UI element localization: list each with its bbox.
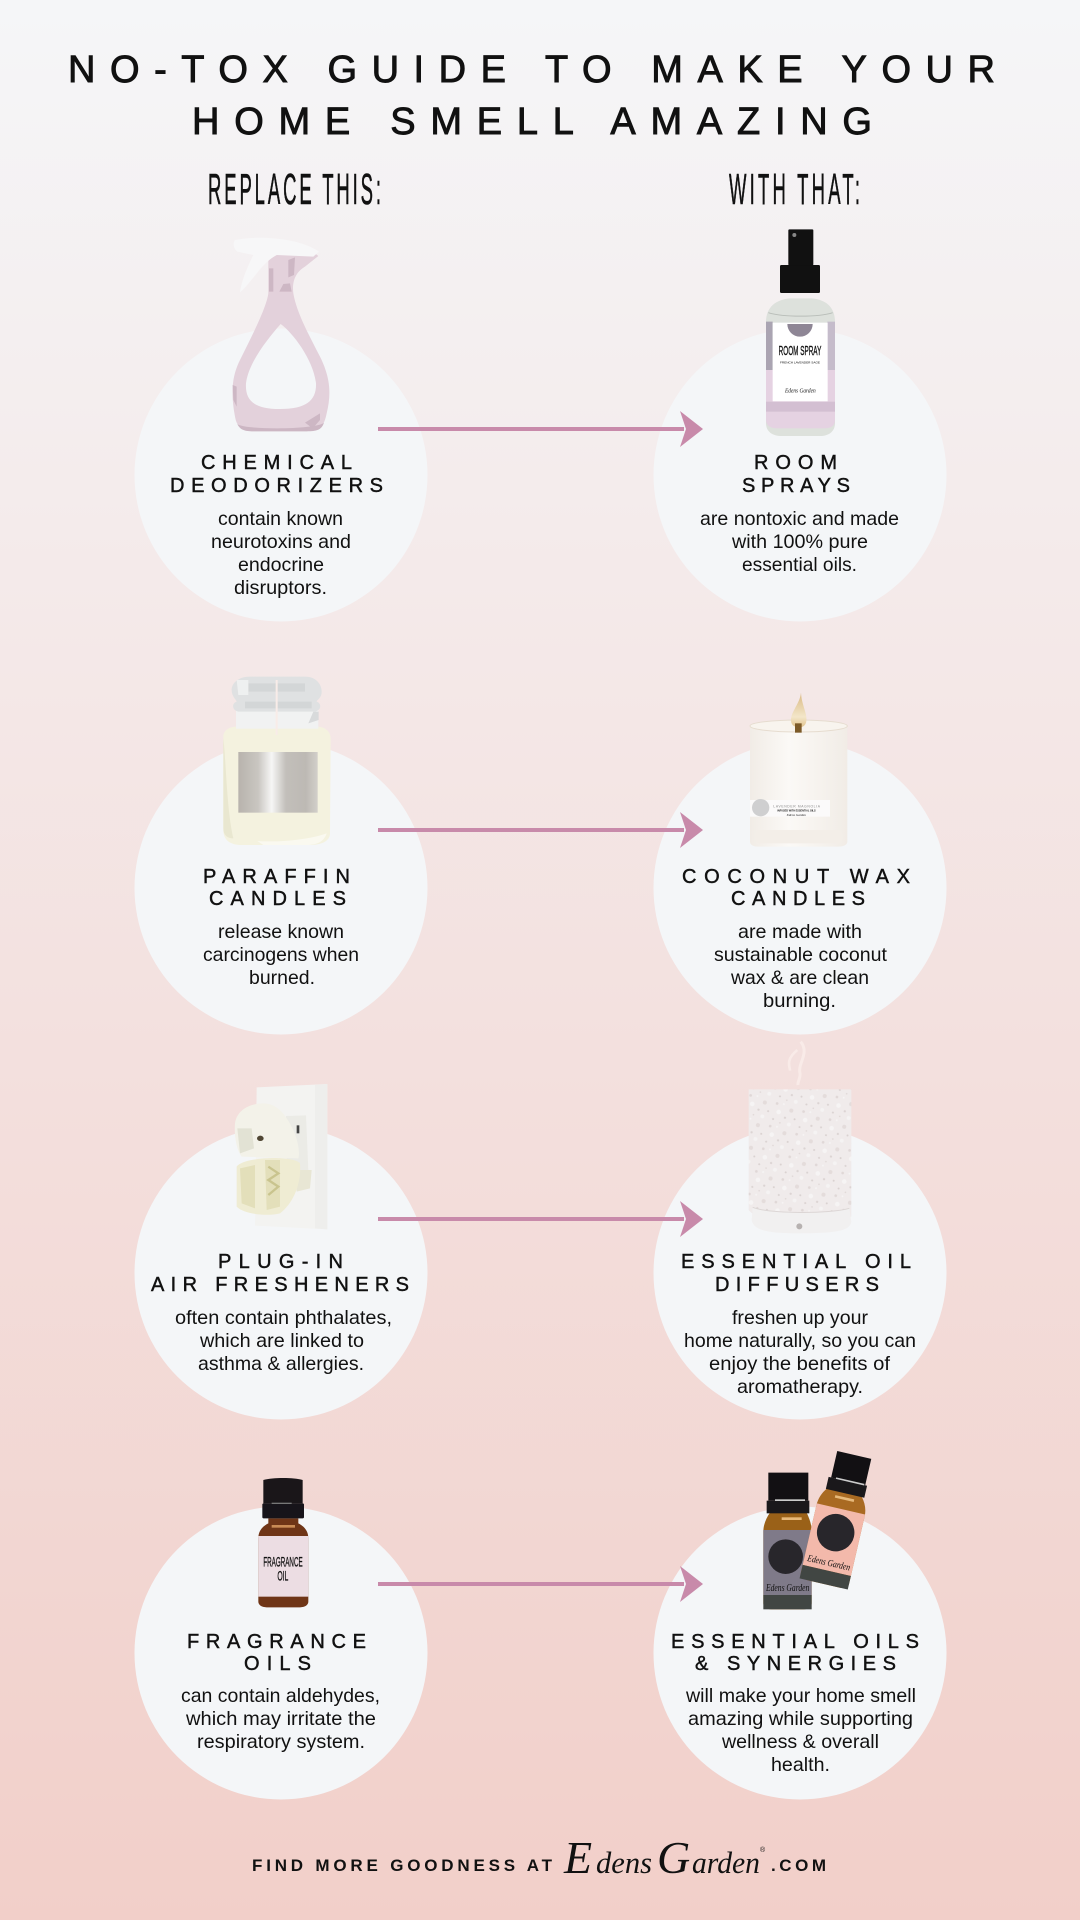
icon: room spray bottle (766, 229, 835, 436)
circle: room sprays (654, 328, 946, 622)
text: room sprays: SPRAYS (742, 475, 850, 497)
footer: find more goodness: .COM (771, 1856, 826, 1875)
text: coconut wax candles: CANDLES (731, 888, 865, 910)
icon: coconut wax candle (750, 693, 847, 847)
text: room sprays: ROOM (754, 452, 837, 474)
title: HOME SMELL AMAZING (192, 101, 872, 143)
text: essential oils and synergies: amazing while supporting (688, 1708, 913, 1730)
icon: fragrance oil bottle: FRAGRANCE (263, 1554, 303, 1570)
circle: chemical deodorizers (134, 328, 428, 622)
icon: room spray bottle: FRENCH LAVENDER SAGE (780, 360, 820, 364)
icon: room spray bottle: Edens Garden (784, 387, 816, 394)
text: chemical deodorizers: CHEMICAL (201, 452, 352, 474)
left bottle (763, 1473, 812, 1609)
icon: coconut wax candle: LAVENDER MAGNOLIA (773, 805, 821, 809)
footer: find more goodness: FIND MORE GOODNESS AT (252, 1856, 553, 1875)
text: fragrance oils: which may irritate the (185, 1708, 376, 1730)
text: room sprays: are nontoxic and made (700, 508, 899, 530)
text: plug-in air fresheners: often contain phthalates, (175, 1307, 392, 1329)
icon: coconut wax candle: INFUSED WITH ESSENTIAL OILS (777, 810, 816, 813)
footer: find more goodness (252, 1832, 826, 1883)
circle: essential oil diffusers (654, 1126, 946, 1420)
circle: plug-in air fresheners (134, 1126, 428, 1420)
text: room sprays: essential oils. (742, 554, 857, 576)
text: fragrance oils: OILS (244, 1653, 311, 1675)
text: chemical deodorizers: contain known (218, 508, 343, 530)
icon: fragrance oil bottle: OIL (277, 1568, 288, 1584)
text: fragrance oils: can contain aldehydes, (181, 1685, 380, 1707)
text: essential oils and synergies: will make your home smell (685, 1685, 916, 1707)
text: paraffin candles: release known (218, 921, 344, 943)
icon: fragrance oil bottle (258, 1478, 308, 1607)
icon: coconut wax candle: Edens Garden (786, 813, 806, 817)
arrow: row 2 (378, 812, 703, 848)
text: fragrance oils (181, 1631, 380, 1753)
text: chemical deodorizers: disruptors. (234, 577, 327, 599)
text: paraffin candles (203, 866, 359, 989)
footer: find more goodness: E (563, 1832, 592, 1883)
text: plug-in air fresheners: asthma & allergies. (198, 1353, 364, 1375)
text: coconut wax candles: burning. (763, 990, 836, 1012)
text: plug-in air fresheners: PLUG-IN (218, 1251, 343, 1273)
text: paraffin candles: carcinogens when (203, 944, 359, 966)
text: essential oil diffusers (681, 1251, 916, 1398)
icon: plug-in air freshener (235, 1084, 327, 1229)
arrow: row 1 (378, 411, 703, 447)
text: essential oil diffusers: freshen up your (732, 1307, 868, 1329)
text: fragrance oils: FRAGRANCE (187, 1631, 366, 1653)
text: coconut wax candles: sustainable coconut (714, 944, 888, 966)
title (68, 49, 995, 143)
text: chemical deodorizers (170, 452, 383, 599)
text: essential oils and synergies: wellness & overall (721, 1731, 879, 1753)
text: coconut wax candles (682, 866, 910, 1012)
text: room sprays (700, 452, 899, 576)
text: paraffin candles: burned. (249, 967, 315, 989)
column heading: replace this: REPLACE THIS: (208, 165, 381, 214)
icon: essential oil bottles (763, 1449, 878, 1609)
left bottle: Edens Garden (765, 1583, 809, 1594)
icon: room spray bottle: ROOM SPRAY (779, 343, 821, 358)
text: coconut wax candles: COCONUT WAX (682, 866, 910, 888)
footer: find more goodness: dens (596, 1845, 652, 1880)
text: plug-in air fresheners (151, 1251, 409, 1375)
text: essential oils and synergies: & SYNERGIES (695, 1653, 896, 1675)
text: essential oil diffusers: aromatherapy. (737, 1376, 863, 1398)
column heading: with that: WITH THAT: (729, 165, 860, 214)
text: essential oil diffusers: enjoy the benefits of (709, 1353, 891, 1375)
footer: find more goodness: arden (692, 1845, 760, 1880)
arrow: row 4 (378, 1566, 703, 1602)
icon: essential oil diffuser (749, 1042, 851, 1233)
text: plug-in air fresheners: AIR FRESHENERS (151, 1274, 409, 1296)
text: chemical deodorizers: endocrine (238, 554, 324, 576)
text: essential oils and synergies: ESSENTIAL OILS (671, 1631, 919, 1653)
text: chemical deodorizers: DEODORIZERS (170, 475, 383, 497)
text: room sprays: with 100% pure (731, 531, 868, 553)
text: essential oils and synergies: health. (771, 1754, 830, 1776)
text: chemical deodorizers: neurotoxins and (211, 531, 351, 553)
text: coconut wax candles: are made with (738, 921, 862, 943)
title: NO-TOX GUIDE TO MAKE YOUR (68, 49, 995, 91)
text: coconut wax candles: wax & are clean (730, 967, 869, 989)
icon: chemical spray bottle (232, 238, 329, 431)
circle: coconut wax candles (654, 742, 946, 1034)
right bottle: Edens Garden (805, 1553, 851, 1574)
footer: find more goodness: ® (760, 1846, 766, 1854)
text: plug-in air fresheners: which are linked to (199, 1330, 364, 1352)
text: essential oil diffusers: DIFFUSERS (715, 1274, 879, 1296)
text: essential oils and synergies (671, 1631, 919, 1776)
arrow: row 3 (378, 1201, 703, 1237)
footer: find more goodness: G (657, 1832, 690, 1883)
text: essential oil diffusers: ESSENTIAL OIL (681, 1251, 911, 1273)
circle: essential oils and synergies (654, 1506, 946, 1800)
right bottle (800, 1449, 878, 1590)
text: paraffin candles: CANDLES (209, 888, 346, 910)
text: essential oil diffusers: home naturally, so you can (684, 1330, 916, 1352)
text: paraffin candles: PARAFFIN (203, 866, 350, 888)
circle: fragrance oils (134, 1506, 428, 1800)
text: fragrance oils: respiratory system. (197, 1731, 365, 1753)
icon: paraffin jar candle (223, 677, 331, 845)
circle: paraffin candles (134, 742, 428, 1034)
